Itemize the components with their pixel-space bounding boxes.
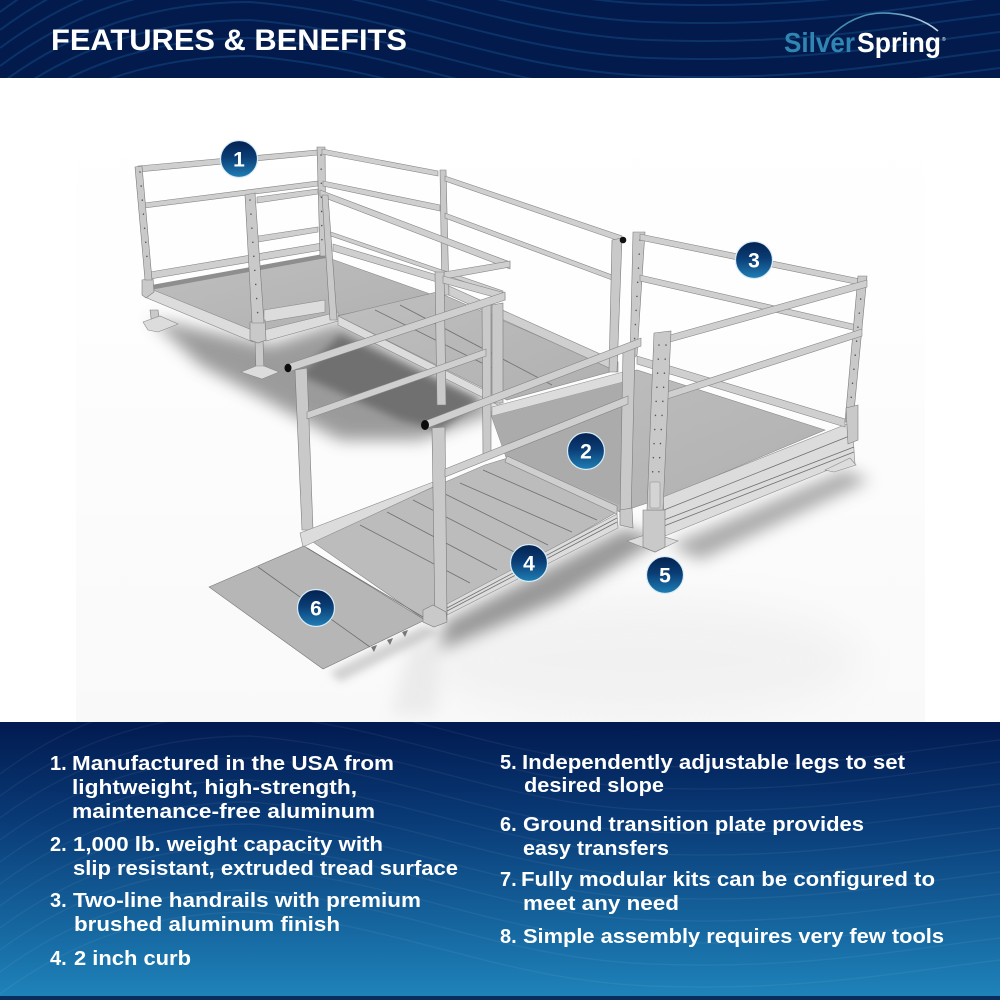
item 3 xyxy=(50,890,421,936)
item 6: easy transfers xyxy=(523,838,669,860)
item 7 xyxy=(500,869,935,915)
item 8: Simple assembly requires very few tools xyxy=(523,926,944,948)
callout badges xyxy=(220,140,772,626)
badge 2: 2 xyxy=(580,440,592,464)
item 6 xyxy=(500,814,864,860)
back rails xyxy=(630,232,867,444)
item 1: lightweight, high-strength, xyxy=(72,777,357,799)
badge 6 xyxy=(298,590,334,626)
badge 1 xyxy=(220,140,258,178)
item 1 xyxy=(50,753,394,823)
badge 5: 5 xyxy=(659,564,671,588)
item 1: Manufactured in the USA from xyxy=(72,753,394,775)
item 4: 2 inch curb xyxy=(74,948,191,970)
footer feature panel xyxy=(0,692,1000,1000)
item 5: 5. xyxy=(500,752,517,774)
item 4: 4. xyxy=(50,948,67,970)
upright plinth and front post xyxy=(421,338,641,627)
badge 4 xyxy=(510,544,548,582)
middle ramp xyxy=(320,149,626,406)
left feature list xyxy=(50,753,458,970)
front corner post and right handrails xyxy=(627,280,867,552)
ramp deck xyxy=(310,458,617,620)
item 5 xyxy=(500,752,905,797)
curb xyxy=(300,482,433,547)
item 3: 3. xyxy=(50,890,67,912)
front fascia xyxy=(663,422,855,536)
plate teeth xyxy=(371,630,408,652)
rear foot xyxy=(825,458,856,472)
item 2: 2. xyxy=(50,834,67,856)
side fascia xyxy=(146,287,253,342)
badge 3 xyxy=(736,242,772,278)
item 6: Ground transition plate provides xyxy=(523,814,864,836)
header banner xyxy=(0,0,1000,78)
logo: SilverSpring: Silver xyxy=(784,27,855,58)
badge 3: 3 xyxy=(748,250,760,272)
deck xyxy=(146,256,436,332)
logo: SilverSpring: Spring xyxy=(857,27,941,58)
front long handrail run xyxy=(284,272,505,530)
item 7: 7. xyxy=(500,869,517,891)
lower landing platform xyxy=(490,232,867,536)
soft floor haze xyxy=(386,594,864,722)
legs and base plates xyxy=(143,310,279,379)
upper landing platform xyxy=(135,147,436,379)
product illustration: modular aluminum ramp xyxy=(134,140,874,722)
item 1: maintenance-free aluminum xyxy=(72,801,375,823)
item 6: 6. xyxy=(500,814,517,836)
black end cap xyxy=(421,420,429,430)
top junction strip xyxy=(505,456,617,514)
ground transition plate xyxy=(209,546,425,669)
badge 6: 6 xyxy=(310,598,322,620)
item 7: Fully modular kits can be configured to xyxy=(521,869,935,891)
logo: SilverSpring: ® xyxy=(942,36,946,43)
item 1: 1. xyxy=(50,753,67,775)
ground shadows xyxy=(150,318,870,682)
item 3: Two-line handrails with premium xyxy=(73,890,421,912)
item 2: 1,000 lb. weight capacity with xyxy=(73,834,383,856)
item 2: slip resistant, extruded tread surface xyxy=(73,858,458,880)
side curb strip xyxy=(447,514,618,615)
rail end cap xyxy=(620,237,626,243)
deck xyxy=(490,370,825,512)
title: FEATURES & BENEFITS xyxy=(51,24,407,57)
item 2 xyxy=(50,834,458,880)
right feature list xyxy=(500,752,944,948)
lower ramp xyxy=(209,456,618,669)
item 5: Independently adjustable legs to set xyxy=(522,752,905,774)
wedge below the deck junction xyxy=(492,372,623,416)
item 3: brushed aluminum finish xyxy=(74,914,340,936)
far curb strip xyxy=(440,282,618,372)
badge 1: 1 xyxy=(233,148,245,172)
item 7: meet any need xyxy=(523,893,679,915)
back rails xyxy=(135,147,326,323)
badge 2 xyxy=(568,432,604,470)
badge 4: 4 xyxy=(523,552,535,576)
badge 5 xyxy=(646,556,684,594)
logo: SilverSpring xyxy=(784,13,946,58)
item 8: 8. xyxy=(500,926,517,948)
black end cap xyxy=(284,364,292,372)
side rails of the middle ramp xyxy=(320,149,622,372)
item 5: desired slope xyxy=(524,775,664,797)
